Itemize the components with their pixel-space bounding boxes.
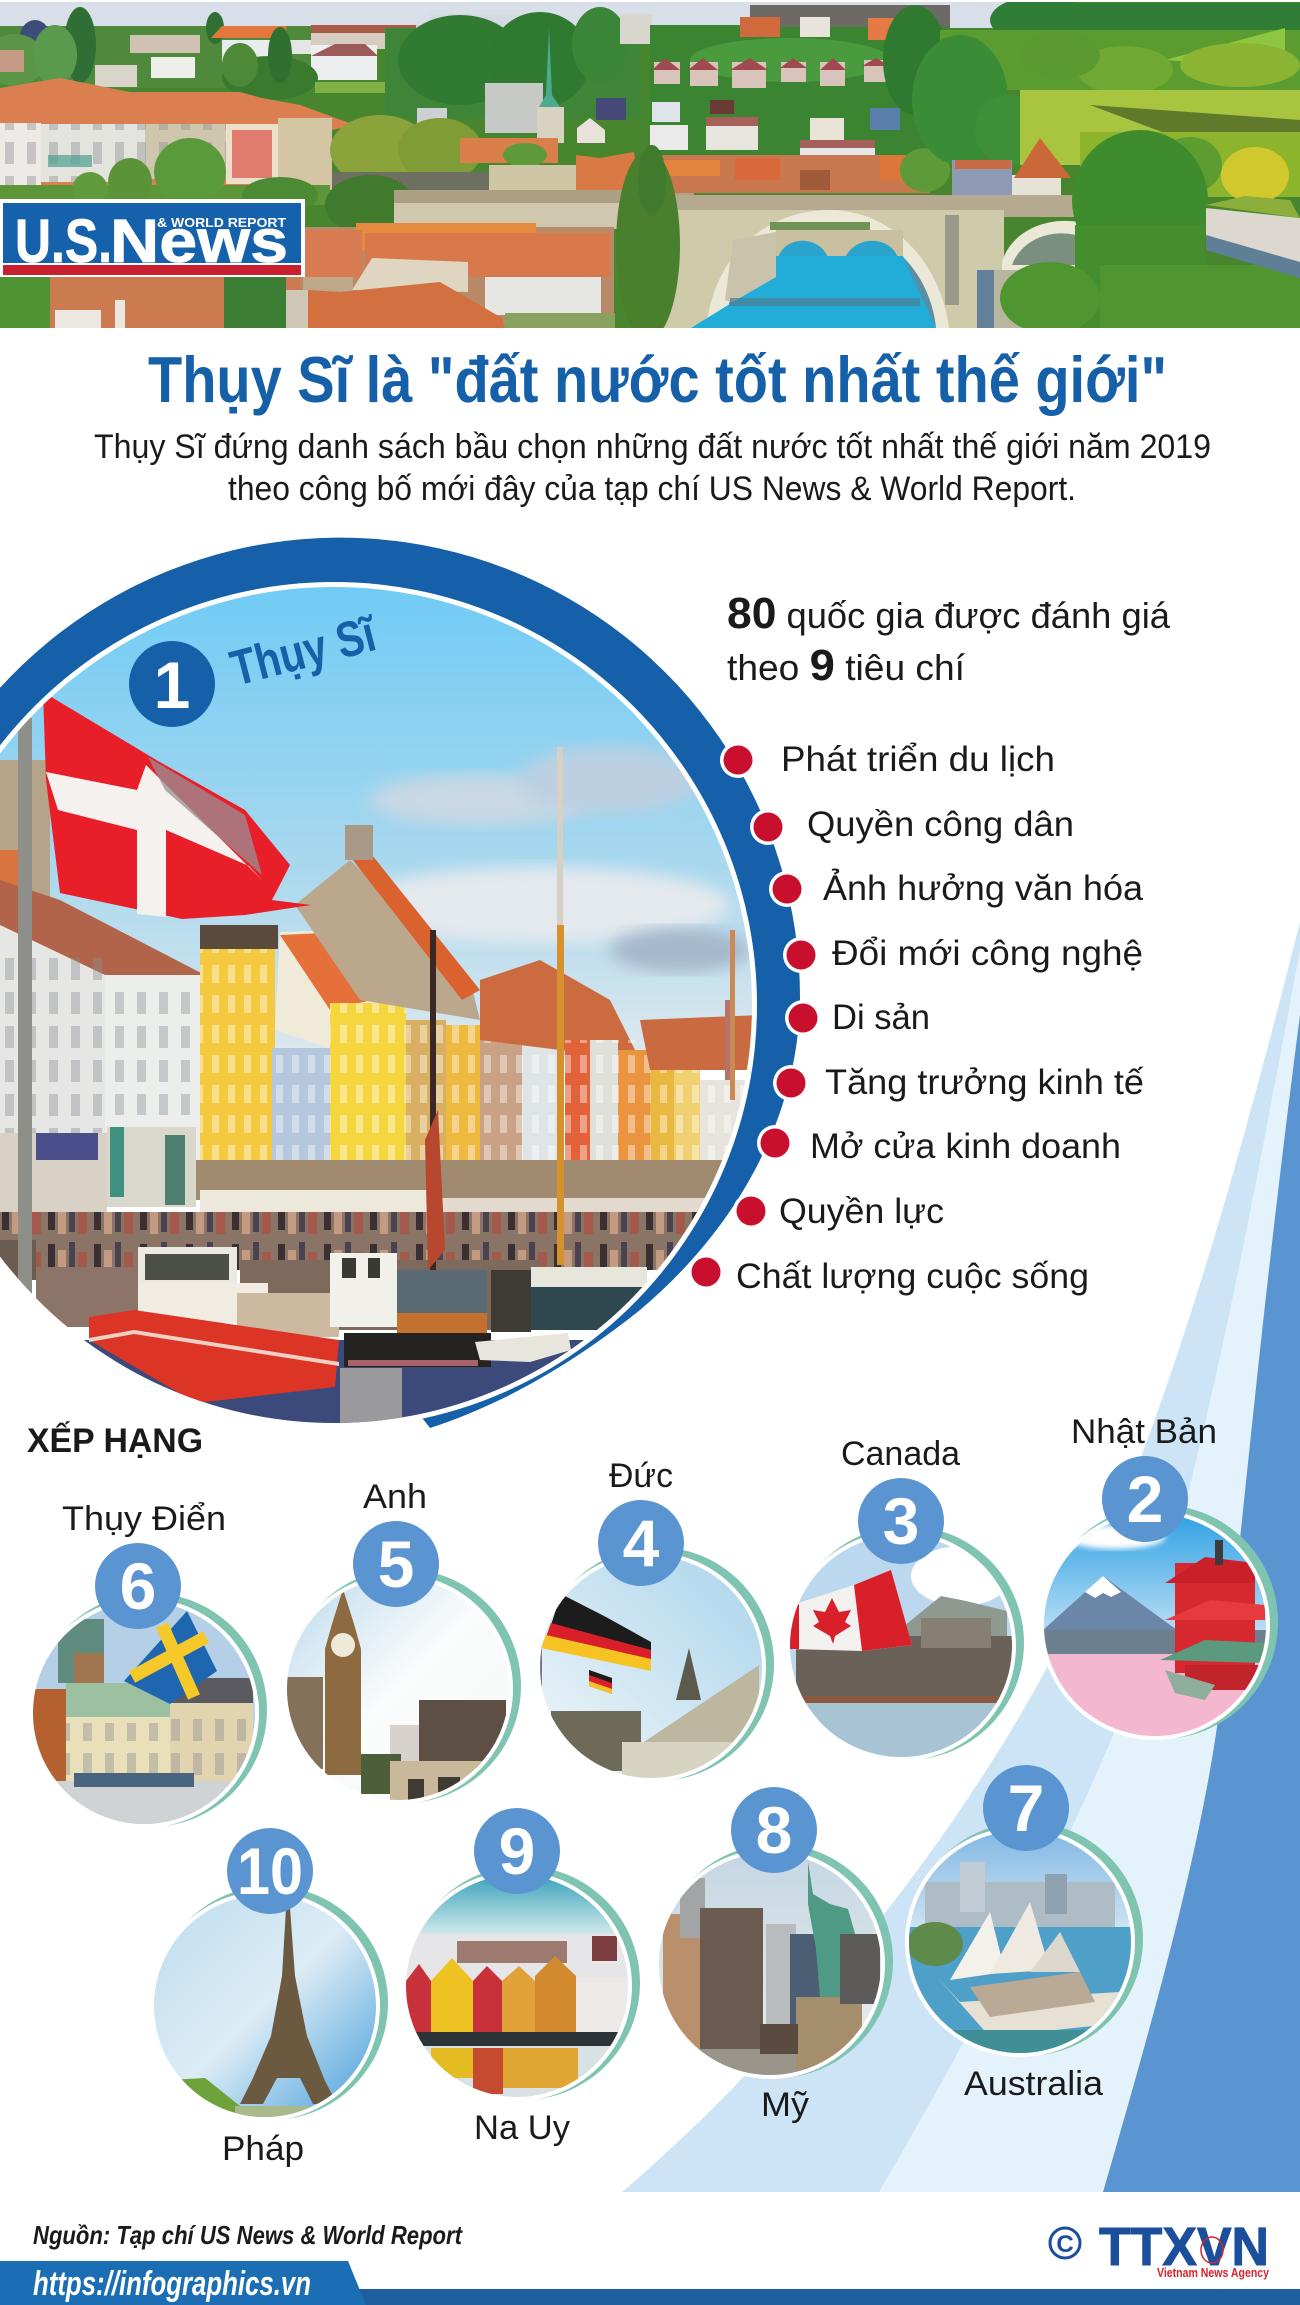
logo: TTXVN: Vietnam News Agency [1157, 2265, 1270, 2280]
title: Thụy Sĩ là "đất nước tốt nhất thế giới" [148, 343, 1167, 416]
intro text: 80 countries, 9 criteria: theo 9 tiêu chí [727, 641, 965, 690]
rank 6: Sweden [29, 1500, 267, 1828]
rank 3: Canada [786, 1435, 1024, 1761]
criteria list: Đổi mới công nghệ [832, 934, 1143, 973]
rank 2: Japan [1040, 1413, 1278, 1740]
rank 3: Canada: 3 [883, 1484, 919, 1558]
rank 1 badge: 1 [154, 648, 190, 722]
criteria list: Chất lượng cuộc sống [736, 1257, 1089, 1296]
blue crescent behind main photo [0, 538, 800, 1428]
criteria list: Tăng trưởng kinh tế [825, 1063, 1144, 1102]
source note: Nguồn: Tạp chí US News & World Report [33, 2220, 463, 2250]
criteria list [688, 740, 1144, 1296]
logo: U.S. News & World Report: News [110, 207, 288, 275]
rank 9: Norway [402, 1808, 640, 2147]
heading: ranking: XẾP HẠNG [27, 1422, 203, 1460]
intro text: 80 countries, 9 criteria: 80 quốc gia được đánh giá [727, 589, 1171, 638]
subtitle text: Thụy Sĩ đứng danh sách bầu chọn những đất nước tốt nhất thế giới năm 2019 [94, 428, 1211, 466]
criteria list: Quyền công dân [807, 805, 1074, 844]
footer bar with website [0, 2261, 1300, 2305]
logo: U.S. News & World Report: U.S. [15, 207, 112, 275]
rank 6: Sweden: Thụy Điển [62, 1500, 226, 1538]
rank 5: United Kingdom: 5 [378, 1527, 414, 1601]
logo: TTXVN: TTXVN [1099, 2217, 1269, 2277]
rank 4: Germany: 4 [623, 1506, 660, 1580]
rank 10: France: Pháp [222, 2130, 304, 2168]
intro text: 80 countries, 9 criteria [727, 589, 1171, 690]
rank 10: France: 10 [237, 1834, 303, 1908]
rank 7: Australia: Australia [964, 2065, 1104, 2103]
banner photo: Bern city and bridge [0, 0, 1300, 340]
rank 8: United States: Mỹ [761, 2086, 810, 2124]
logo: TTXVN: C [1056, 2231, 1074, 2258]
footer bar with website: https://infographics.vn [33, 2265, 311, 2303]
logo: U.S. News & World Report: & WORLD REPORT [157, 215, 286, 230]
rank 1 badge [129, 641, 215, 727]
subtitle text: theo công bố mới đây của tạp chí US News & World Report. [228, 470, 1076, 508]
rank 3: Canada: Canada [841, 1435, 961, 1473]
criteria list: Ảnh hưởng văn hóa [823, 868, 1144, 908]
rank 2: Japan: Nhật Bản [1071, 1413, 1217, 1451]
background: blue swoosh shapes [622, 922, 1300, 2192]
criteria list: Di sản [832, 998, 930, 1037]
rank 7: Australia: 7 [1008, 1771, 1044, 1845]
main photo: Nyhavn harbour with flag [0, 580, 760, 1430]
rank 5: United Kingdom: Anh [363, 1478, 427, 1516]
rank 4: Germany: Đức [609, 1457, 673, 1495]
logo: U.S. News & World Report [0, 199, 305, 277]
rank 9: Norway: Na Uy [474, 2109, 571, 2147]
label: Thụy Sĩ: Thụy Sĩ [225, 605, 384, 697]
rank 10: France [150, 1828, 388, 2168]
rank 8: United States [655, 1787, 893, 2124]
criteria list: Quyền lực [779, 1192, 944, 1231]
rank 6: Sweden: 6 [120, 1549, 156, 1623]
criteria list: Phát triển du lịch [781, 740, 1055, 779]
subtitle text [94, 428, 1211, 508]
rank 8: United States: 8 [756, 1793, 792, 1867]
rank 2: Japan: 2 [1127, 1462, 1163, 1536]
rank 9: Norway: 9 [499, 1814, 535, 1888]
criteria list: Mở cửa kinh doanh [810, 1127, 1121, 1166]
rank 5: United Kingdom [283, 1478, 521, 1804]
rank 7: Australia [905, 1765, 1143, 2103]
rank 4: Germany [536, 1457, 774, 1782]
